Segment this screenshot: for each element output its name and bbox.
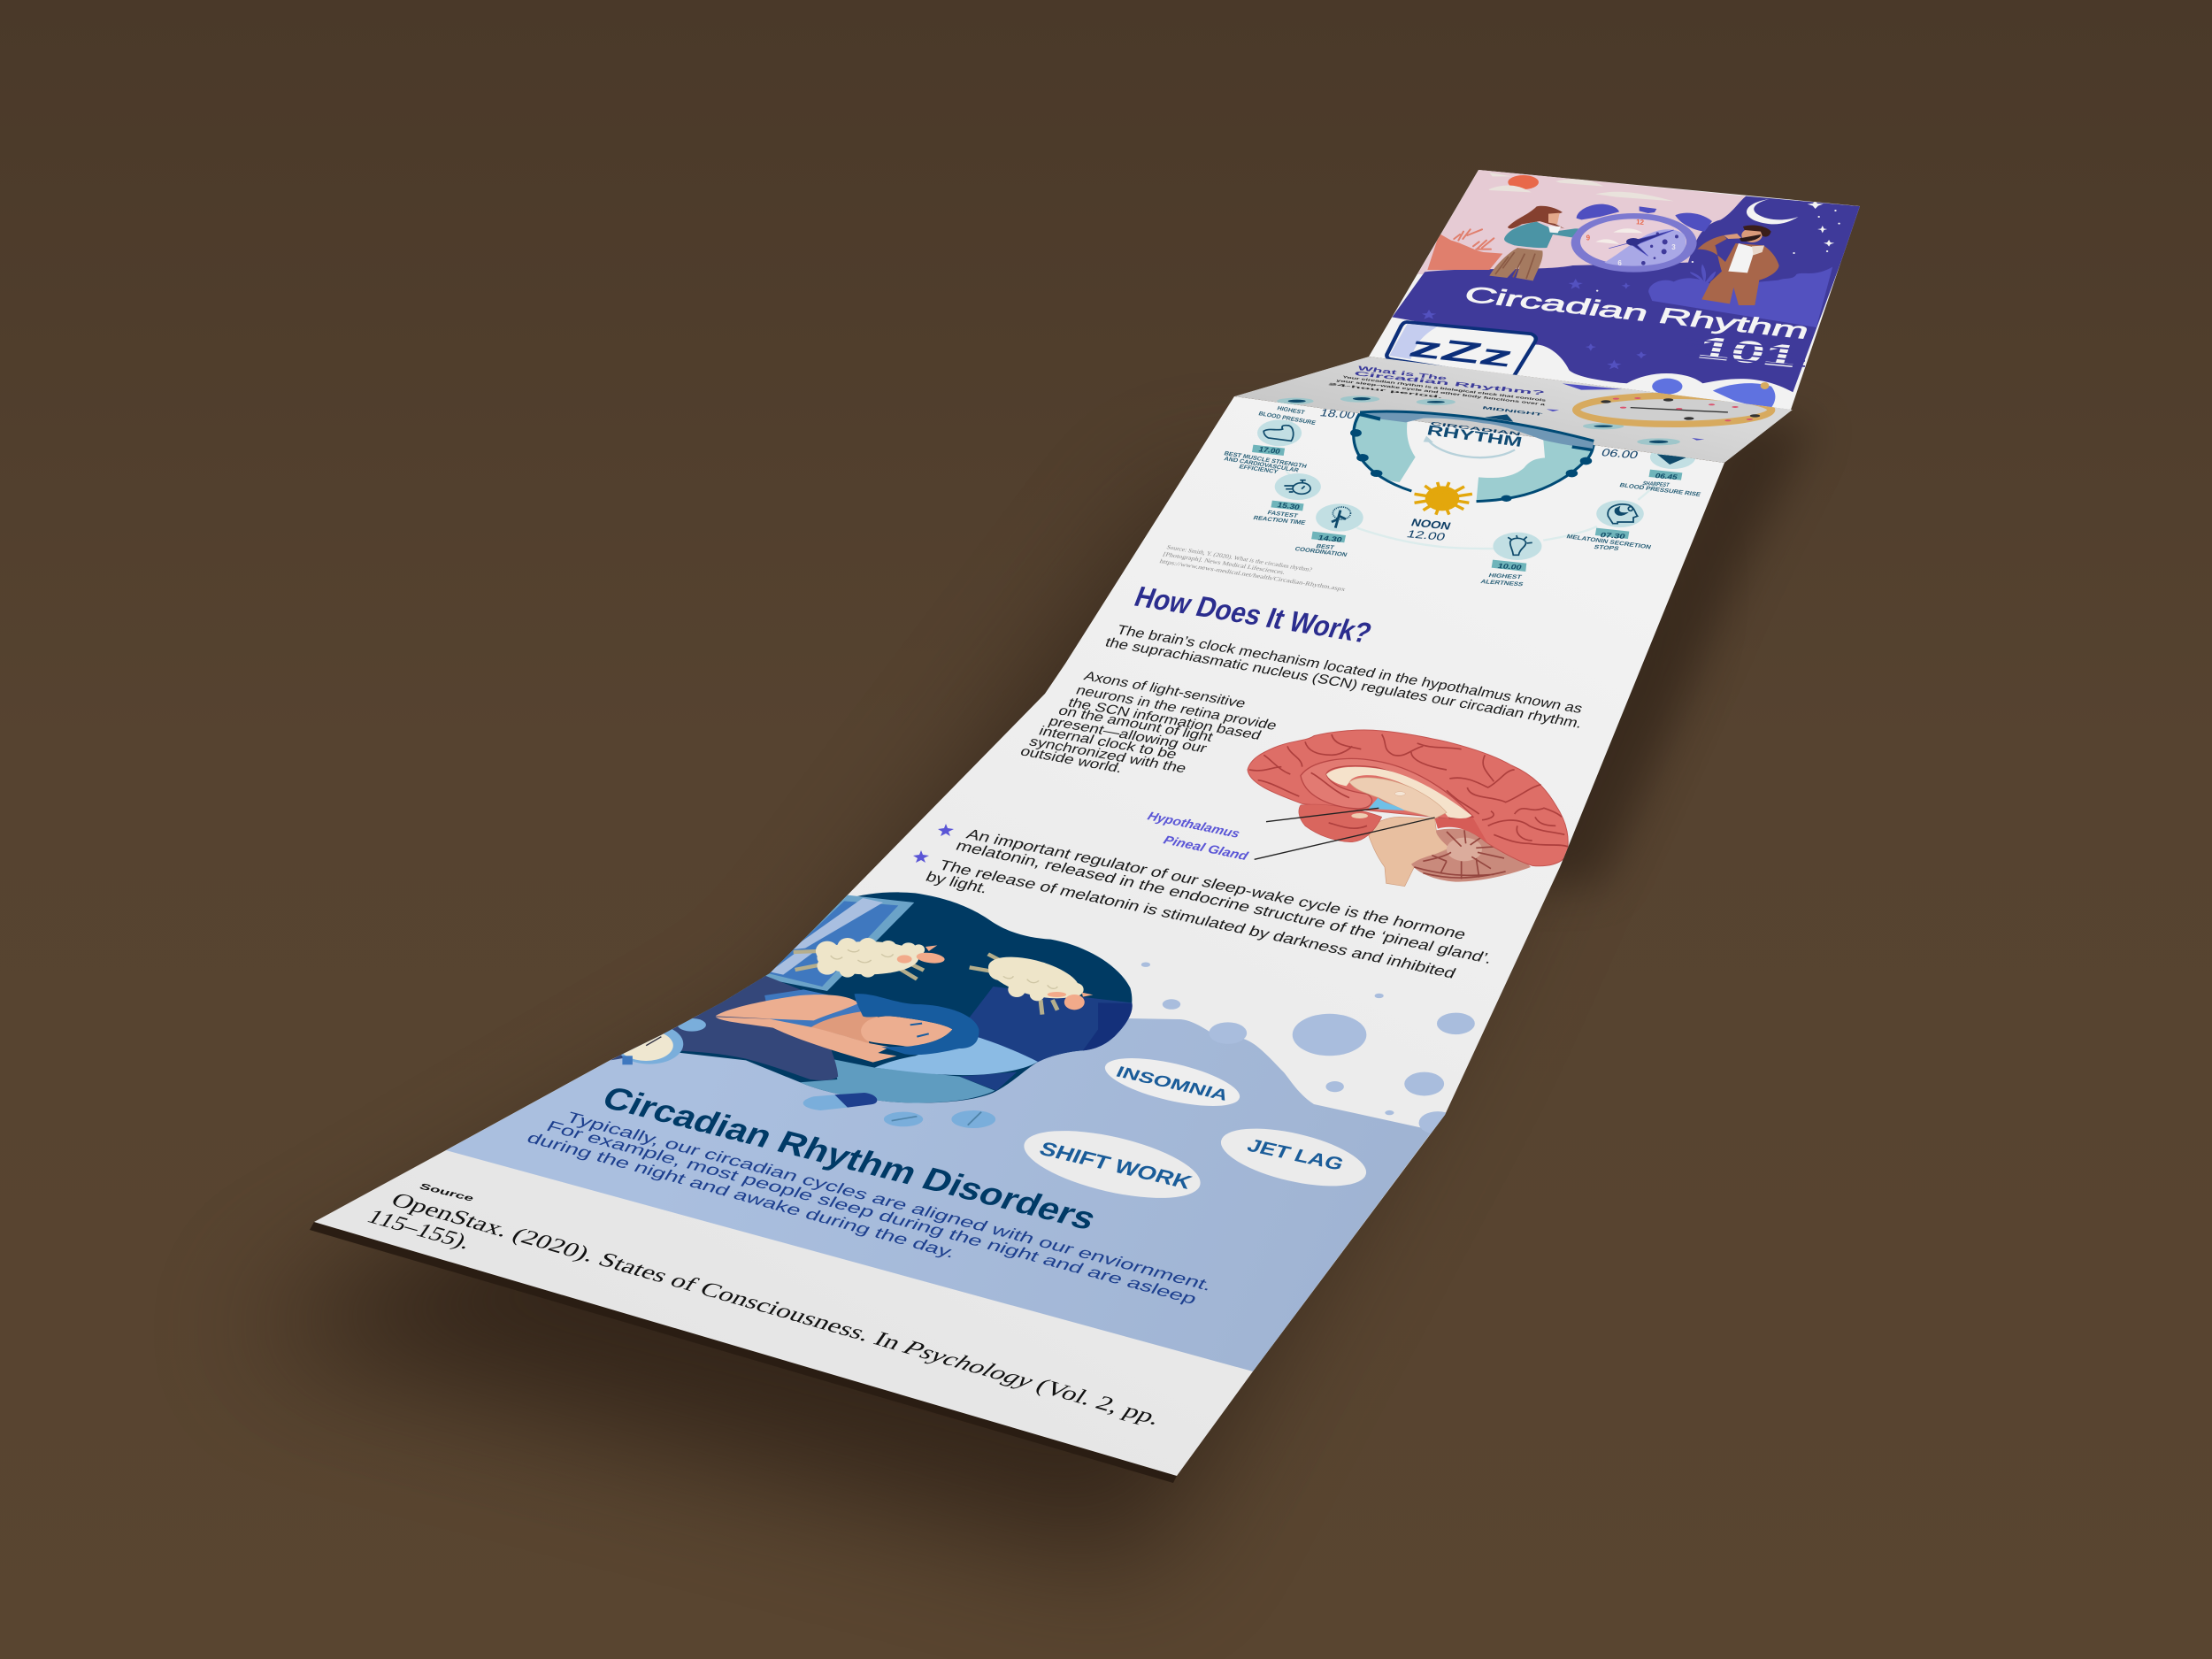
chart labels: 15.30: [1276, 502, 1301, 511]
panel: circadian rhythm chart: [363, 404, 1702, 1429]
bed headboard: [970, 987, 1133, 1063]
chart labels: BLOOD PRESSURE: [1257, 410, 1317, 426]
night sky: [1392, 196, 1862, 392]
brain stem: [1367, 817, 1449, 887]
small nucleus: [1394, 792, 1405, 795]
icon: stopwatch: [1284, 480, 1310, 494]
chart source note: Source: Smith, Y. (2020). What is the circadian rhythm?: [1165, 543, 1314, 573]
chart labels: EFFICIENCY: [1238, 463, 1279, 475]
clock clouds: [1595, 228, 1643, 244]
band midnight label: MIDNIGHT: [1482, 406, 1543, 417]
source citation: 115–155).: [363, 1205, 477, 1254]
door panel: [768, 901, 898, 987]
chart labels: NOON: [1409, 517, 1452, 533]
text block: axons: the SCN information based: [1066, 695, 1263, 742]
door light: [790, 898, 883, 949]
chart labels: 12.00: [1405, 528, 1447, 543]
clock stars: [1641, 232, 1678, 265]
clock hands: [1609, 230, 1674, 256]
chart labels: BEST MUSCLE STRENGTH: [1223, 449, 1308, 469]
cingulate band: [1301, 758, 1473, 818]
pill: insomnia: [1101, 1048, 1244, 1116]
text block: disorders intro: during the night and awake during the day.: [524, 1129, 960, 1262]
text block: intro: The brain’s clock mechanism located in the hypothalmus known as: [1115, 622, 1585, 716]
chart labels: [1223, 404, 1702, 588]
thalamus area: [1349, 778, 1447, 818]
pill: insomnia: INSOMNIA: [1113, 1064, 1231, 1104]
band heading: Circadian Rhythm?: [1353, 370, 1546, 396]
rhythm label: RHYTHM: [1425, 422, 1524, 449]
door frame: [759, 895, 914, 991]
blob background: [668, 892, 1132, 1102]
eyes: [910, 1024, 929, 1037]
paper shadow: [248, 416, 1814, 1566]
text block: axons: neurons in the retina provide: [1074, 682, 1279, 733]
cerebellum folds: [1414, 830, 1506, 879]
salmon hill: [1427, 234, 1502, 270]
clouds: [1489, 173, 1674, 201]
label: pineal gland: Pineal Gland: [1162, 833, 1250, 864]
icon: lightbulb: [1508, 535, 1532, 555]
pill: jet lag: [1216, 1118, 1371, 1197]
stage icons: [1263, 426, 1638, 555]
leaves: [1454, 229, 1494, 250]
source heading: Source: [418, 1181, 476, 1203]
chart labels: REACTION TIME: [1252, 514, 1307, 526]
chart labels: AND CARDIOVASCULAR: [1223, 455, 1300, 473]
clock numbers: [1586, 218, 1676, 267]
dark blanket: [611, 975, 838, 1080]
gold clock ring: [1577, 396, 1771, 424]
text block: intro: the suprachiasmatic nucleus (SCN) regulates our circadian rhythm.: [1103, 634, 1585, 731]
band text block: 24-hour period.: [1328, 382, 1443, 399]
panel: folded band: [1234, 357, 1793, 463]
panel: disorders blue background: [446, 979, 1451, 1371]
title: Circadian Rhythm: [1461, 282, 1813, 344]
band text block: Your circadian rhythm is a biological clock that controls: [1342, 375, 1547, 402]
bubbles: [1141, 963, 1475, 1134]
gold knob: [1761, 382, 1769, 389]
panel: lower paper: [314, 396, 1724, 1476]
text block: melatonin: The release of melatonin is stimulated by darkness and inhibited: [936, 857, 1458, 982]
chart source note: https://www.news-medical.net/health/Circadian-Rhythm.aspx: [1158, 557, 1348, 593]
clock face teal right: [1477, 440, 1594, 502]
heading: circadian rhythm disorders: Circadian Rhythm Disorders: [596, 1079, 1102, 1236]
band stage markers: [1277, 383, 1704, 445]
text block: axons: [1018, 668, 1279, 776]
slate dome: [1360, 411, 1594, 449]
chart dome over fold: [1359, 411, 1594, 451]
chart labels: 17.00: [1257, 446, 1281, 456]
pill: jet lag: JET LAG: [1244, 1136, 1347, 1175]
text block: melatonin: An important regulator of our sleep-wake cycle is the hormone: [964, 826, 1469, 943]
sheep 1: [794, 938, 945, 979]
hair: [855, 994, 979, 1055]
temporal lobe: [1299, 804, 1382, 842]
chart labels: 07.30: [1599, 532, 1626, 541]
sun: [1508, 175, 1539, 189]
corpus callosum: [1326, 767, 1471, 818]
alarm clock: [616, 1018, 706, 1064]
chart labels: HIGHEST: [1276, 404, 1307, 416]
chart source note: [Photograph]. News Medical Lifesciences.: [1162, 550, 1286, 575]
subtitle 101: 101: [1694, 329, 1803, 374]
clock numbers: 9: [1586, 234, 1591, 242]
woman with mug: [1489, 206, 1578, 280]
text block: axons: outside world.: [1018, 743, 1125, 776]
chart labels: ALERTNESS: [1479, 578, 1525, 588]
woman forearm and hand: [716, 1017, 896, 1063]
chart labels: BEST: [1315, 542, 1336, 551]
stage circles: [1257, 419, 1695, 560]
face: [861, 1016, 953, 1047]
sheep 2: [970, 949, 1093, 1015]
chart labels: FASTEST: [1266, 509, 1300, 519]
panel: header: [1327, 159, 1902, 425]
chest: [810, 1011, 878, 1044]
cerebrum: [1248, 730, 1568, 866]
chart labels: 06.45: [1654, 472, 1679, 481]
bush and hills: [1648, 267, 1832, 327]
pill: shift work: [1018, 1118, 1206, 1211]
pill: shift work: SHIFT WORK: [1036, 1138, 1195, 1194]
chart labels: 06.00: [1600, 447, 1640, 462]
tablets: [884, 1110, 995, 1128]
text block: axons: present—allowing our: [1047, 713, 1210, 756]
chart labels: HIGHEST: [1487, 572, 1524, 580]
chart labels: 10.00: [1496, 563, 1523, 572]
chart labels: 18.00: [1318, 407, 1356, 421]
heading: how does it work: How Does It Work?: [1130, 580, 1376, 649]
zzz text: zZz: [1404, 330, 1518, 373]
timeline track: [1286, 471, 1660, 549]
text block: axons: Axons of light-sensitive: [1082, 668, 1248, 710]
lower cortex fill: [1435, 816, 1488, 843]
icon: shield heart: [1657, 454, 1687, 465]
sulci: [1249, 734, 1568, 847]
clock: [1571, 213, 1697, 273]
band heading: What is The: [1356, 365, 1448, 382]
icon: head with moon: [1608, 504, 1638, 524]
moon: [1747, 199, 1798, 224]
text block: disorders intro: Typically, our circadian cycles are aligned with our enviornment.: [563, 1109, 1217, 1294]
man: [1697, 225, 1779, 305]
clock numbers: 12: [1636, 218, 1645, 227]
bullet stars: [913, 824, 954, 863]
plant: [1690, 264, 1716, 285]
header illustration: [1427, 173, 1779, 305]
chart labels: MELATONIN SECRETION: [1565, 533, 1652, 550]
midnight marker: [1485, 414, 1513, 422]
blue sphere: [1652, 379, 1682, 395]
chart labels: SHARPEST: [1641, 480, 1671, 488]
clock bells: [1577, 204, 1712, 232]
band text block: [1328, 375, 1547, 406]
text block: axons: internal clock to be: [1037, 723, 1179, 762]
value tags: [1252, 445, 1682, 572]
cerebellum: [1411, 829, 1531, 882]
icon: sun: [1415, 482, 1472, 515]
text block: axons: on the amount of light: [1056, 703, 1216, 744]
dome ring arc: [1360, 411, 1594, 441]
clock numbers: 6: [1617, 259, 1622, 267]
text block: axons: synchronized with the: [1027, 733, 1189, 776]
icon: balance figure: [1332, 507, 1350, 528]
teal blanket: [800, 1059, 995, 1102]
capsule: [803, 1093, 877, 1110]
band text block: your sleep–wake cycle and other body functions over a: [1336, 379, 1546, 406]
chart labels: 14.30: [1317, 534, 1343, 544]
ring ticks and dots: [1350, 429, 1592, 502]
chart source note: [1158, 543, 1348, 593]
text block: melatonin: melatonin, released in the endocrine structure of the ‘pineal gland’.: [953, 838, 1495, 967]
clock ring: [1354, 411, 1594, 502]
blue top: [764, 989, 863, 1031]
chart labels: BLOOD PRESSURE RISE: [1618, 481, 1702, 498]
text block: disorders intro: For example, most people sleep during the night and are asleep: [543, 1118, 1201, 1308]
pillow: [875, 1037, 1038, 1075]
chart labels: STOPS: [1593, 543, 1620, 551]
subtitle 101: [1686, 329, 1805, 374]
stars: [1431, 201, 1840, 292]
illustration: brain: [1248, 730, 1568, 887]
clock face teal left: [1355, 413, 1416, 482]
icon: muscle arm: [1263, 426, 1294, 441]
hypothalamus blue: [1369, 798, 1405, 810]
illustration: sleepless woman: [611, 892, 1133, 1128]
clock numbers: 3: [1671, 243, 1676, 251]
sleep box: [1386, 322, 1536, 378]
blue smear: [1563, 385, 1622, 390]
label: hypothalamus: Hypothalamus: [1146, 810, 1242, 841]
chart labels: COORDINATION: [1294, 545, 1348, 558]
source citation: OpenStax. (2020). States of Consciousness. In Psychology (Vol. 2, pp.: [387, 1188, 1166, 1429]
rotation arrow: [1424, 436, 1515, 457]
blue bell: [1713, 383, 1775, 410]
woman arm upper: [716, 995, 858, 1020]
label lines: [1255, 808, 1435, 859]
pituitary: [1351, 813, 1368, 818]
text block: melatonin: by light.: [923, 869, 991, 897]
ring ticks: [1359, 412, 1594, 451]
pink sky: [1417, 170, 1746, 274]
circadian label: CIRCADIAN: [1430, 420, 1522, 437]
